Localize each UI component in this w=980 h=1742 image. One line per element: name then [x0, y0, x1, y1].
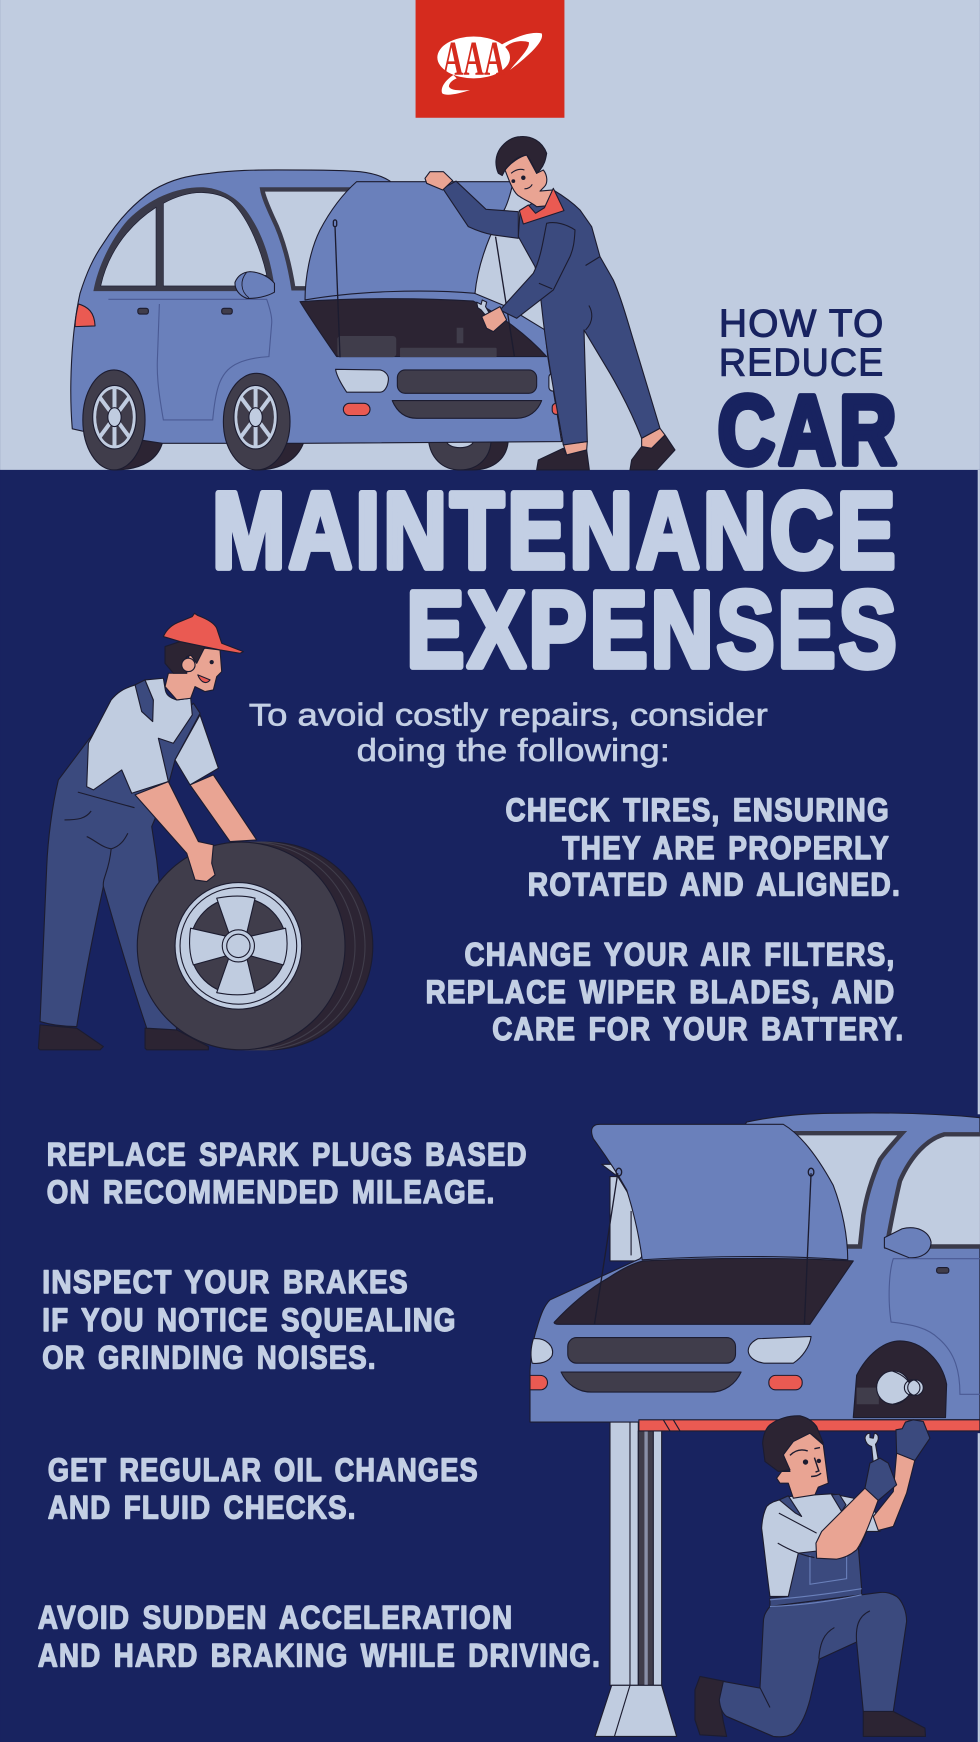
worker hair	[165, 642, 205, 673]
tire rim	[175, 883, 302, 1009]
mechanic coverall	[518, 190, 660, 445]
raised car windshield	[778, 1133, 902, 1247]
tip: driving habits	[38, 1600, 601, 1673]
mechanic collar	[519, 188, 564, 224]
car rear window	[101, 207, 156, 286]
car side window	[163, 193, 267, 286]
intro text: doing the following:	[357, 733, 670, 768]
car mirror	[235, 272, 274, 298]
background: light top panel	[0, 0, 980, 470]
mechanic upper hand	[425, 172, 453, 190]
kneeling mechanic hair	[763, 1416, 823, 1471]
rear wheel	[83, 370, 145, 470]
raised car body	[530, 1113, 980, 1422]
tip: air filters: REPLACE WIPER BLADES, AND	[426, 974, 896, 1010]
worker shirt right sleeve	[175, 715, 218, 785]
kneeling mechanic front glove	[865, 1458, 897, 1500]
kneeling mechanic front arm	[816, 1488, 878, 1559]
tip: spark plugs	[47, 1136, 528, 1210]
heading: how to reduce car: REDUCE	[719, 342, 884, 385]
raised car headlights	[748, 1336, 811, 1363]
tip: brakes	[42, 1264, 457, 1376]
raised car door line	[889, 1259, 980, 1394]
tip: check tires: ROTATED AND ALIGNED.	[528, 866, 901, 902]
mechanic hair	[496, 137, 547, 176]
worker face	[165, 648, 222, 700]
worker arms	[190, 775, 257, 842]
worker red cap	[163, 613, 243, 653]
raised car hood props	[594, 1168, 814, 1324]
raised car mirror	[884, 1228, 931, 1258]
mechanic neck and face	[505, 155, 553, 207]
kneeling mechanic shoes	[695, 1676, 926, 1736]
illustration: kneeling mechanic	[695, 1416, 930, 1737]
car window frame	[93, 187, 274, 291]
tip: check tires: THEY ARE PROPERLY	[562, 830, 890, 866]
tip: oil changes	[48, 1452, 479, 1526]
raised car indicators	[769, 1375, 802, 1390]
illustration: mechanic with tire	[38, 613, 373, 1050]
kneeling mechanic shirt	[762, 1494, 880, 1596]
kneeling mechanic rear glove	[896, 1420, 930, 1460]
kneeling mechanic bib	[770, 1546, 862, 1606]
heading: maintenance expenses	[212, 470, 900, 690]
heading: how to reduce car	[718, 303, 900, 484]
tip: check tires	[506, 792, 901, 902]
tip: driving habits: AVOID SUDDEN ACCELERATION	[38, 1600, 513, 1636]
car door outline	[108, 299, 272, 420]
front wheel	[223, 373, 290, 470]
car front wheel back	[257, 378, 303, 470]
worker shirt torso	[87, 678, 192, 793]
car rear wheel back	[114, 378, 162, 470]
tip: air filters: CHANGE YOUR AIR FILTERS,	[464, 936, 896, 972]
background: dark navy panel	[0, 470, 980, 1742]
illustration: lift column	[595, 1164, 677, 1736]
illustration: mechanic at hood	[425, 137, 675, 470]
tire stack	[147, 842, 373, 1050]
wrench	[865, 1433, 878, 1463]
tip: air filters	[426, 936, 904, 1047]
kneeling mechanic rear arm	[873, 1453, 915, 1530]
intro text	[249, 697, 768, 768]
mechanic raised arm	[443, 181, 518, 238]
kneeling mechanic straps	[779, 1494, 846, 1516]
tip: brakes: INSPECT YOUR BRAKES	[42, 1264, 409, 1300]
mechanic shoes	[537, 435, 675, 470]
illustration: blue car with open hood	[71, 170, 562, 470]
illustration: raised car	[530, 1113, 980, 1431]
kneeling mechanic neck and face	[777, 1433, 828, 1498]
raised car lower grille	[561, 1372, 741, 1392]
tip: oil changes: AND FLUID CHECKS.	[48, 1490, 357, 1526]
car lower grille	[392, 401, 542, 418]
mechanic lower arm	[500, 223, 575, 318]
heading: how to reduce car: CAR	[718, 375, 900, 484]
raised car side window	[887, 1134, 980, 1247]
car windshield	[262, 189, 358, 288]
car body	[71, 170, 562, 443]
AAA logo: AAA	[443, 30, 505, 85]
car door handles	[138, 308, 232, 314]
heading: how to reduce car: HOW TO	[719, 303, 884, 346]
car engine bay	[300, 299, 547, 357]
tip: check tires: CHECK TIRES, ENSURING	[506, 792, 890, 828]
raised car wheel arch and hub	[853, 1341, 947, 1418]
worker overalls	[40, 680, 200, 1030]
AAA logo	[416, 0, 564, 118]
tip: spark plugs: REPLACE SPARK PLUGS BASED	[47, 1136, 528, 1172]
car headlight	[336, 369, 388, 392]
car far wheel	[428, 434, 508, 470]
kneeling mechanic pants	[719, 1592, 907, 1737]
worker shoes	[38, 1025, 208, 1050]
hood props	[333, 220, 514, 357]
mechanic lower hand with wrench	[477, 300, 507, 332]
tip: brakes: IF YOU NOTICE SQUEALING	[42, 1302, 457, 1338]
tip: oil changes: GET REGULAR OIL CHANGES	[48, 1452, 479, 1488]
tip: brakes: OR GRINDING NOISES.	[42, 1340, 377, 1376]
worker front arm and hand	[135, 782, 215, 882]
tip: air filters: CARE FOR YOUR BATTERY.	[492, 1011, 904, 1047]
raised car grille	[568, 1338, 736, 1363]
intro text: To avoid costly repairs, consider	[249, 697, 768, 732]
raised car open hood	[592, 1124, 848, 1260]
car open hood	[305, 182, 513, 300]
tire front	[137, 842, 345, 1050]
car tail light	[75, 304, 95, 327]
lift red beam	[639, 1420, 980, 1431]
car indicator light	[343, 403, 370, 416]
tip: spark plugs: ON RECOMMENDED MILEAGE.	[47, 1174, 496, 1210]
car grille	[397, 370, 537, 393]
mechanic ankles	[563, 428, 665, 455]
raised car engine bay	[554, 1258, 853, 1324]
tip: driving habits: AND HARD BRAKING WHILE DRIVING.	[38, 1637, 601, 1673]
